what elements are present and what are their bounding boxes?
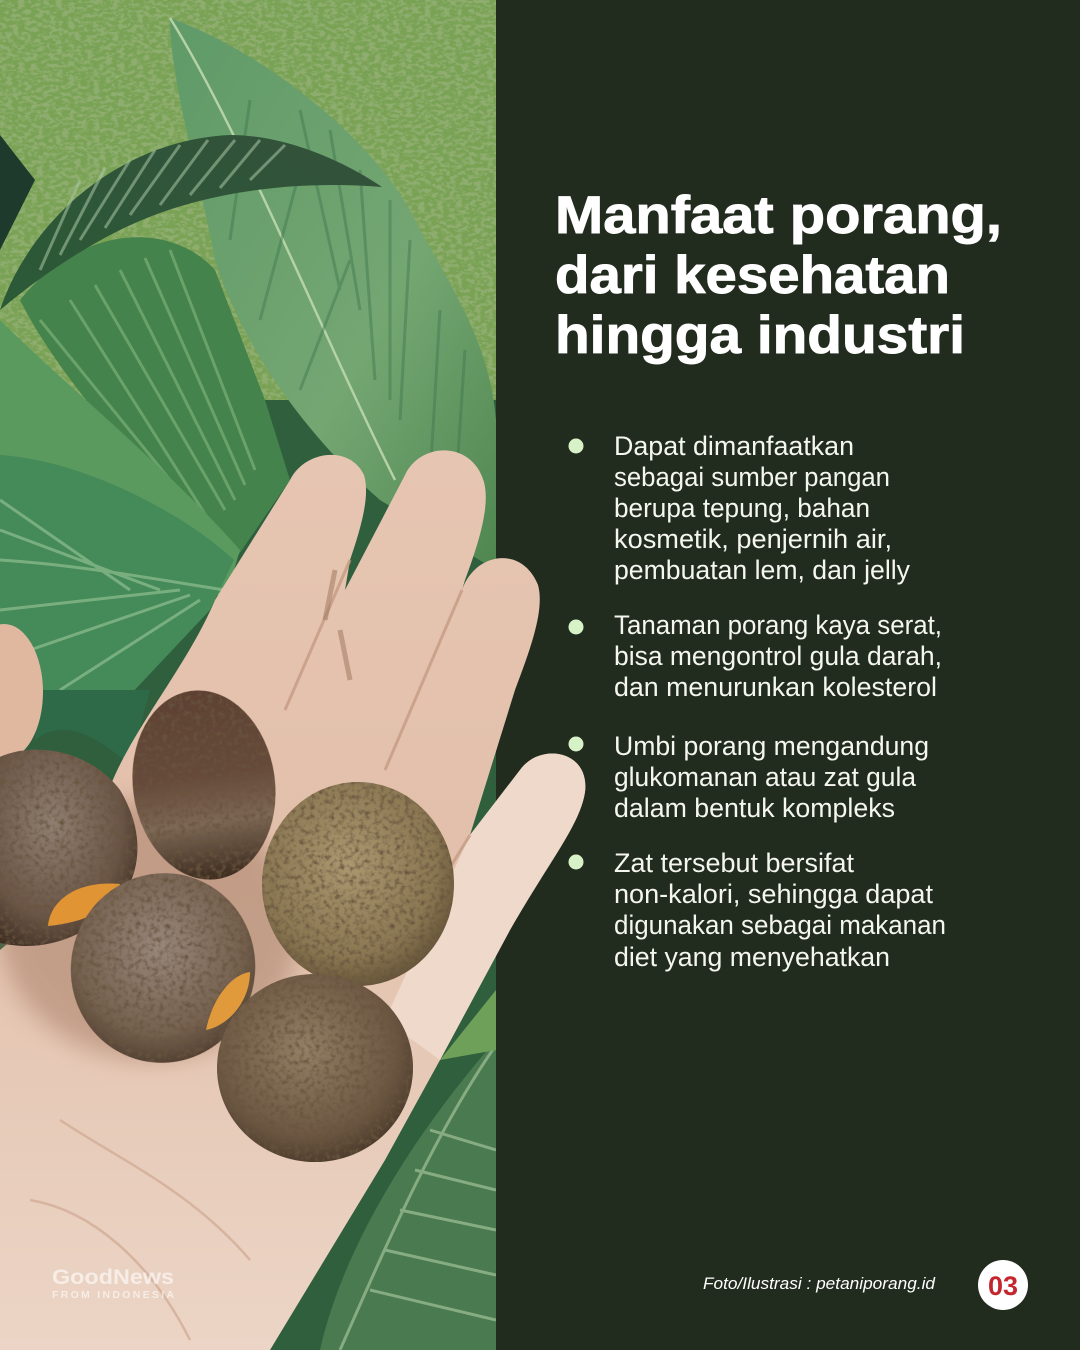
bullet 2: Tanaman porang kaya serat,	[614, 610, 942, 640]
bullet 2	[568, 610, 942, 702]
photo credit: Foto/Ilustrasi : petaniporang.id	[703, 1274, 936, 1293]
tuber 4 orange flesh	[206, 972, 250, 1030]
bullet 4: digunakan sebagai makanan	[614, 910, 946, 940]
bullet 1: kosmetik, penjernih air,	[614, 524, 892, 554]
photo: grass and leaves	[0, 0, 496, 1350]
page number badge: 03	[988, 1271, 1018, 1301]
title: hingga industri	[555, 306, 965, 365]
tuber 4	[50, 852, 276, 1084]
bullet 4: Zat tersebut bersifat	[614, 848, 854, 878]
title: dari kesehatan	[555, 246, 950, 305]
bullet 2: dan menurunkan kolesterol	[614, 672, 937, 702]
title: Manfaat porang,	[555, 186, 1002, 245]
photo: hand	[0, 450, 585, 1350]
tuber 1 orange flesh	[48, 883, 120, 926]
bullet 2: bisa mengontrol gula darah,	[614, 641, 942, 671]
bullet 4: diet yang menyehatkan	[614, 942, 890, 972]
bullet 1	[568, 431, 910, 585]
bullet 3: glukomanan atau zat gula	[614, 762, 917, 792]
bullet 1: berupa tepung, bahan	[614, 493, 870, 523]
bullet 1: Dapat dimanfaatkan	[614, 431, 854, 461]
logo: GoodNews from Indonesia: FROM INDONESIA	[52, 1289, 174, 1301]
tuber 5	[217, 974, 413, 1162]
logo: GoodNews from Indonesia	[52, 1266, 174, 1301]
photo: porang tubers	[0, 681, 454, 1162]
bullet 4: non-kalori, sehingga dapat	[614, 879, 933, 909]
bullet 4	[568, 848, 946, 972]
pinky highlight	[385, 754, 585, 1060]
tuber 1	[0, 750, 137, 946]
thumb	[0, 624, 43, 760]
bullet 1: sebagai sumber pangan	[614, 462, 890, 492]
bullet 3: Umbi porang mengandung	[614, 731, 929, 761]
tuber 2	[120, 681, 288, 889]
title	[555, 186, 1002, 365]
bullet 3	[568, 731, 929, 823]
tuber 3	[262, 782, 454, 986]
page number badge	[978, 1260, 1028, 1310]
bullet 3: dalam bentuk kompleks	[614, 793, 895, 823]
logo: GoodNews from Indonesia: GoodNews	[52, 1266, 174, 1289]
bullet 1: pembuatan lem, dan jelly	[614, 555, 910, 585]
